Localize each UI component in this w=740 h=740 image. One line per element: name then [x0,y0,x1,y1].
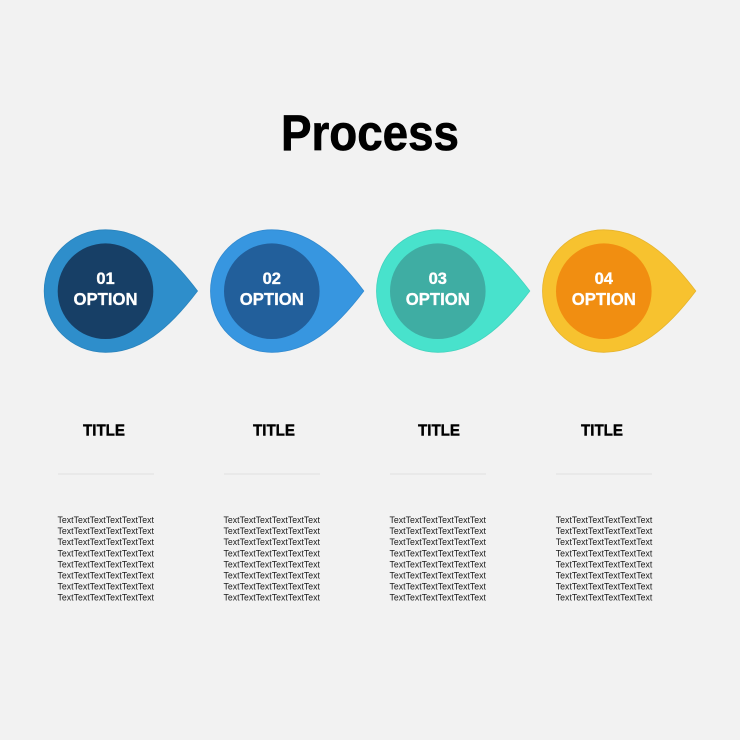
column 3 text block: TextTextTextTextTextText [390,593,486,604]
column 1 text block: TextTextTextTextTextText [58,515,154,526]
column 3 text block: TextTextTextTextTextText [390,548,486,559]
column 2 text block: TextTextTextTextTextText [224,515,320,526]
column 2 text block: TextTextTextTextTextText [224,582,320,593]
column 2 text block: TextTextTextTextTextText [224,559,320,570]
column 3 title: TITLE [418,422,460,440]
column 4 text block: TextTextTextTextTextText [556,559,653,570]
column 4 text block: TextTextTextTextTextText [556,582,653,593]
column 2 title: TITLE [253,422,295,440]
column 4 title: TITLE [581,422,623,440]
column 1 text block [58,515,154,604]
column 4 text block: TextTextTextTextTextText [556,570,653,582]
column 2 text block: TextTextTextTextTextText [224,570,320,582]
step 2 teardrop [210,230,364,352]
step 4 teardrop: 04 [595,270,614,288]
step 3 teardrop: OPTION [406,289,470,309]
step 4 teardrop [542,230,696,352]
column 3 text block: TextTextTextTextTextText [390,526,486,537]
column 3 text block: TextTextTextTextTextText [390,537,486,548]
step 2 teardrop: 02 [263,270,281,288]
title: Process [281,105,459,161]
column 2 text block: TextTextTextTextTextText [224,526,320,537]
column 2 text block: TextTextTextTextTextText [224,548,320,559]
column 3 text block [390,515,486,604]
column 4 text block [556,515,653,604]
column 1 text block: TextTextTextTextTextText [58,570,154,582]
step 3 teardrop: 03 [429,270,447,288]
column 4 text block: TextTextTextTextTextText [556,593,653,604]
column 4 text block: TextTextTextTextTextText [556,537,653,548]
column 3 text block: TextTextTextTextTextText [390,582,486,593]
column 1 text block: TextTextTextTextTextText [58,526,154,537]
step 1 teardrop: OPTION [74,289,138,309]
column 4 text block: TextTextTextTextTextText [556,548,653,559]
step 3 teardrop [376,230,530,352]
column 3 text block: TextTextTextTextTextText [390,559,486,570]
column 3 text block: TextTextTextTextTextText [390,515,486,526]
column 2 text block: TextTextTextTextTextText [224,537,320,548]
step 4 teardrop: OPTION [572,289,636,309]
step 1 teardrop: 01 [96,270,115,288]
column 1 title: TITLE [83,422,125,440]
column 4 text block: TextTextTextTextTextText [556,526,653,537]
step 2 teardrop: OPTION [240,289,304,309]
column 3 text block: TextTextTextTextTextText [390,570,486,582]
column 2 text block [224,515,320,604]
column 2 text block: TextTextTextTextTextText [224,593,320,604]
column 4 text block: TextTextTextTextTextText [556,515,653,526]
column 1 text block: TextTextTextTextTextText [58,548,154,559]
column 1 text block: TextTextTextTextTextText [58,537,154,548]
column 1 text block: TextTextTextTextTextText [58,582,154,593]
column 1 text block: TextTextTextTextTextText [58,593,154,604]
step 1 teardrop [44,230,198,352]
column 1 text block: TextTextTextTextTextText [58,559,154,570]
